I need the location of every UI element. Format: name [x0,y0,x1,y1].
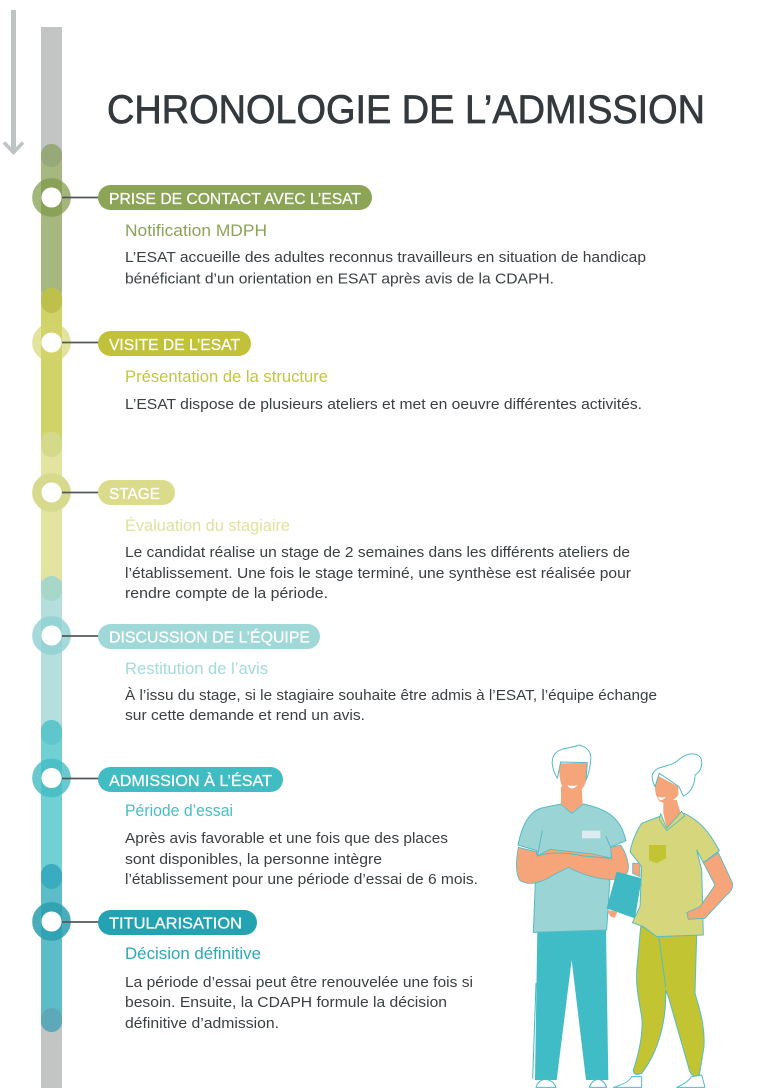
title: CHRONOLOGIE DE L’ADMISSION [107,88,705,132]
hand holding clipboard [607,910,617,918]
step 3: stage: Le candidat réalise un stage de 2 semaines dans les différents ateliers de [125,545,630,561]
step 3: stage: Évaluation du stagiaire [125,516,290,535]
step 2: visite de l'ESAT: VISITE DE L’ESAT [109,337,240,354]
illustration: two care workers [516,745,733,1087]
arrow: time direction [4,10,23,153]
step 1: prise de contact [37,183,646,288]
step 4: discussion de l'équipe: sur cette demande et rend un avis. [125,708,365,724]
step 6: titularisation: La période d’essai peut être renouvelée une fois si [125,975,473,991]
step 5: admission à l'ESAT [37,763,478,888]
clipboard [607,872,642,918]
step 2: visite de l'ESAT [37,328,642,413]
step 1: prise de contact: bénéficiant d’un orientation en ESAT après avis de la CDAPH. [125,272,554,288]
step 4: discussion de l'équipe: Restitution de l’avis [125,660,268,678]
step 6: titularisation: besoin. Ensuite, la CDAPH formule la décision [125,995,447,1011]
step 5: admission à l'ESAT: l’établissement pour une période d’essai de 6 mois. [125,872,478,888]
step 3: stage: rendre compte de la période. [125,586,328,602]
step 6: titularisation: TITULARISATION [109,916,242,932]
step 3: stage: l’établissement. Une fois le stage terminé, une synthèse est réalisée pour [125,566,631,582]
step 1: prise de contact: PRISE DE CONTACT AVEC L’ESAT [109,191,361,208]
step 2: visite de l'ESAT: L’ESAT dispose de plusieurs ateliers et met en oeuvre différentes activités. [125,397,642,413]
timeline bar [41,27,62,1088]
step 3: stage: STAGE [109,486,160,503]
step 1: prise de contact: L’ESAT accueille des adultes reconnus travailleurs en situation de handicap [125,250,646,266]
woman figure [613,754,733,1087]
step 6: titularisation: Décision définitive [125,945,261,963]
step 5: admission à l'ESAT: ADMISSION À L’ÉSAT [109,771,272,790]
step 5: admission à l'ESAT: Période d’essai [125,802,233,820]
man figure [516,745,628,1087]
step 4: discussion de l'équipe: À l’issu du stage, si le stagiaire souhaite être admis à l’ESAT, l’équipe échange [125,687,657,704]
step 2: visite de l'ESAT: Présentation de la structure [125,368,328,386]
step 4: discussion de l'équipe: DISCUSSION DE L’ÉQUIPE [109,628,310,646]
step 5: admission à l'ESAT: Après avis favorable et une fois que des places [125,831,448,847]
step 6: titularisation [37,907,473,1032]
step 6: titularisation: définitive d’admission. [125,1016,279,1032]
step 3: stage [37,478,631,602]
step 1: prise de contact: Notification MDPH [125,222,267,240]
step 4: discussion de l'équipe [37,621,657,724]
step 5: admission à l'ESAT: sont disponibles, la personne intègre [125,852,382,868]
